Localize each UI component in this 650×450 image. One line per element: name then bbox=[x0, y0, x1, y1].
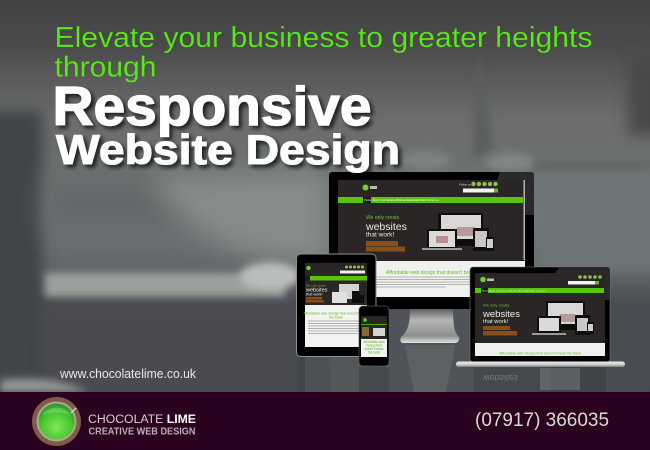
navigation bar: Contact us bbox=[427, 199, 440, 202]
tablet search box bbox=[340, 270, 365, 274]
icon: laptop bbox=[456, 267, 625, 367]
laptop hero copy bbox=[482, 302, 520, 336]
phone heading: doesn't break bbox=[364, 347, 384, 351]
laptop navigation bar: Portfolio bbox=[527, 290, 536, 292]
tablet hero copy: We only create bbox=[306, 284, 326, 288]
icon: desktop monitor bbox=[329, 172, 534, 343]
laptop mini devices bbox=[532, 301, 594, 335]
tablet body lines bbox=[308, 320, 365, 334]
tablet heading: the bank bbox=[329, 316, 343, 320]
navigation bar: Effective Marketing bbox=[396, 199, 418, 202]
phone frame bbox=[359, 306, 389, 366]
social buttons bbox=[459, 182, 498, 186]
navigation bar: Home bbox=[364, 199, 372, 202]
navigation bar: About bbox=[373, 199, 380, 202]
laptop navigation bar: Effective Marketing bbox=[509, 290, 528, 292]
body copy lines bbox=[376, 276, 488, 288]
device reflections on the desk bbox=[297, 345, 606, 392]
search box bbox=[463, 188, 498, 192]
heading: Responsive: Responsive bbox=[52, 75, 372, 137]
phone number: (07917) 366035 bbox=[475, 410, 609, 431]
laptop navigation bar: Our Services bbox=[496, 290, 510, 292]
monitor stand bbox=[400, 308, 459, 343]
tablet social buttons bbox=[345, 266, 364, 268]
laptop base bbox=[456, 362, 625, 367]
title: tagline second line: through bbox=[54, 52, 156, 84]
tablet heading: Affordable web design that doesn't break bbox=[304, 312, 369, 316]
hero copy: that work! bbox=[366, 232, 394, 238]
tablet mini devices bbox=[332, 284, 364, 303]
company name: CHOCOLATE LIME bbox=[88, 414, 196, 426]
navigation bar: Portfolio bbox=[417, 199, 427, 202]
tablet navigation bar bbox=[305, 276, 367, 280]
laptop social buttons bbox=[578, 275, 602, 279]
laptop hero copy: websites bbox=[482, 309, 520, 320]
navigation bar bbox=[338, 197, 523, 203]
laptop search box bbox=[568, 281, 599, 284]
affordable heading: Affordable web design that doesn't break the bank bbox=[386, 270, 497, 276]
phone heading bbox=[363, 340, 385, 354]
tablet hero copy: that work! bbox=[306, 292, 322, 296]
navigation bar: Our Services bbox=[381, 199, 396, 202]
mini devices bbox=[422, 213, 494, 251]
laptop heading: Affordable web design that doesn't break the bank bbox=[499, 352, 581, 356]
tablet screen bbox=[304, 263, 369, 347]
phone heading: design that bbox=[366, 344, 382, 348]
footer bar bbox=[0, 392, 650, 450]
hero copy: We only create bbox=[366, 215, 399, 221]
hero copy: websites bbox=[365, 221, 407, 233]
site logo bbox=[362, 184, 377, 190]
heading: Website Design: Website Design bbox=[56, 126, 400, 173]
laptop lid bbox=[470, 267, 610, 362]
tablet hero copy: websites bbox=[305, 288, 328, 294]
company strapline: CREATIVE WEB DESIGN bbox=[88, 426, 196, 438]
social buttons: Follow us on bbox=[459, 182, 475, 186]
monitor frame bbox=[329, 172, 534, 309]
phone heading: the bank bbox=[368, 350, 381, 354]
tablet heading bbox=[304, 312, 369, 320]
title: tagline: Elevate your business to greater heights bbox=[54, 22, 592, 54]
website url: www.chocolatelime.co.uk bbox=[59, 366, 196, 381]
laptop navigation bar: Contact us bbox=[536, 290, 547, 292]
laptop navigation bar: Home bbox=[482, 290, 489, 292]
icon: smartphone bbox=[359, 306, 389, 366]
laptop hero copy: We only create bbox=[483, 302, 510, 308]
laptop screen bbox=[475, 273, 605, 356]
icon: tablet bbox=[296, 254, 376, 356]
laptop hero copy: that work! bbox=[483, 319, 509, 325]
phone screen bbox=[361, 316, 387, 357]
hero copy bbox=[365, 215, 407, 252]
monitor screen bbox=[338, 180, 525, 297]
device reflections on the desk: websites bbox=[482, 373, 519, 383]
laptop site logo bbox=[480, 277, 494, 282]
tablet hero copy bbox=[305, 284, 328, 302]
icon: company logo bbox=[32, 397, 81, 446]
tablet frame bbox=[296, 254, 376, 356]
laptop navigation bar bbox=[475, 288, 604, 293]
tablet site logo bbox=[306, 266, 311, 270]
laptop navigation bar: About bbox=[489, 290, 495, 292]
phone heading: Affordable web bbox=[363, 340, 385, 344]
